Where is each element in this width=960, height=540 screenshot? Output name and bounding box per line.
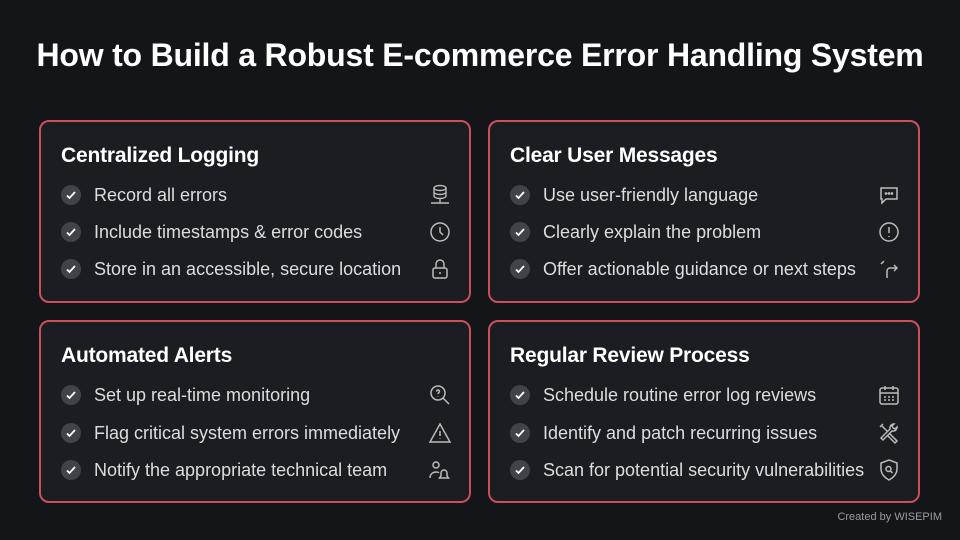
item 2: Include timestamps & error codes — [94, 222, 362, 242]
item 2: Clearly explain the problem — [543, 222, 761, 242]
item 3: Scan for potential security vulnerabilities — [543, 460, 864, 480]
heading: Regular Review Process — [510, 344, 750, 367]
item 3: Store in an accessible, secure location — [94, 259, 401, 279]
heading: Centralized Logging — [61, 144, 259, 167]
panel: clear user messages — [488, 120, 920, 303]
item 1: Schedule routine error log reviews — [543, 385, 816, 405]
heading: Clear User Messages — [510, 144, 718, 167]
panel: centralized logging — [39, 120, 471, 303]
item 1 — [61, 385, 450, 405]
item 1: Use user-friendly language — [543, 185, 758, 205]
credit: Created by WISEPIM — [837, 511, 942, 523]
panel: regular review process — [488, 320, 920, 503]
item 1: Set up real-time monitoring — [94, 385, 310, 405]
item 2: Flag critical system errors immediately — [94, 423, 400, 443]
title: How to Build a Robust E-commerce Error Handling System — [36, 37, 924, 73]
heading: Automated Alerts — [61, 344, 232, 367]
item 2 — [510, 423, 898, 444]
item 3: Offer actionable guidance or next steps — [543, 259, 856, 279]
panel: automated alerts — [39, 320, 471, 503]
item 1 — [510, 185, 898, 205]
item 2 — [61, 222, 450, 242]
item 1 — [61, 184, 449, 205]
item 2: Identify and patch recurring issues — [543, 423, 817, 443]
item 3: Notify the appropriate technical team — [94, 460, 387, 480]
item 2 — [510, 222, 899, 242]
item 1: Record all errors — [94, 185, 227, 205]
